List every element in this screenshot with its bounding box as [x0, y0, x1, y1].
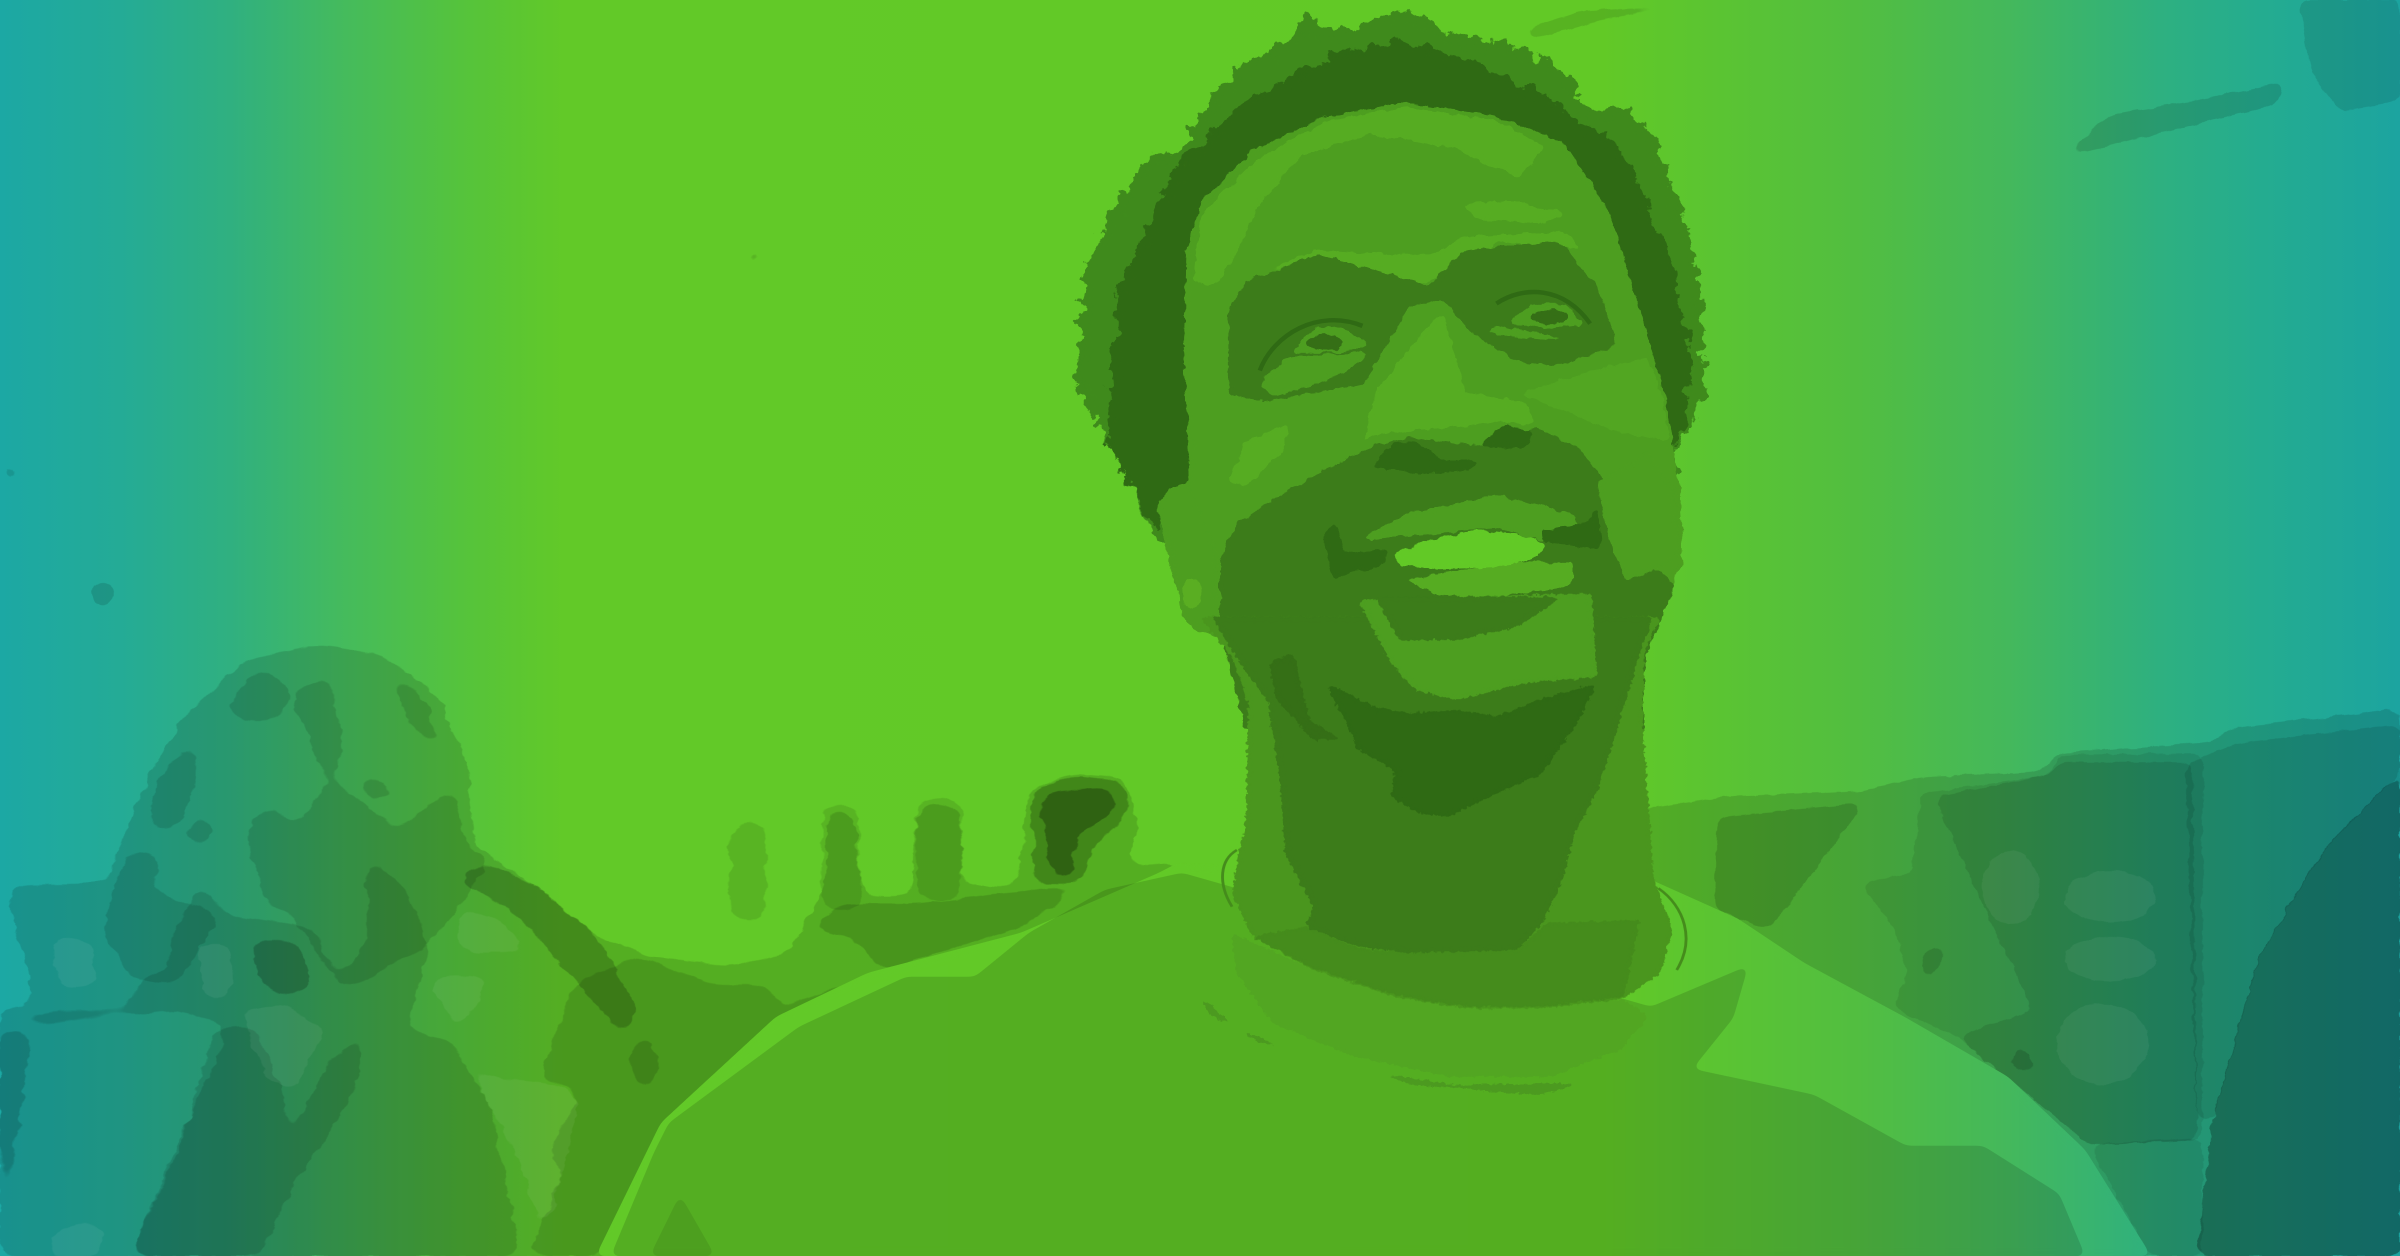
shirt — [596, 863, 2151, 1256]
side beard — [1269, 653, 1342, 740]
chair lower middle fill — [528, 957, 865, 1256]
nose — [1362, 312, 1537, 446]
collar band — [1232, 933, 1648, 1077]
comb end dark block — [1033, 776, 1129, 884]
upper lip — [1358, 496, 1586, 540]
lower column — [2090, 1137, 2202, 1256]
goatee — [1326, 683, 1597, 817]
mouth right corner — [1541, 500, 1601, 549]
left scene: chair and objects — [0, 644, 1200, 1256]
lower lip — [1403, 562, 1572, 598]
left edge dark strip — [0, 1030, 31, 1256]
forehead highlight — [1193, 107, 1546, 286]
light cutouts — [42, 908, 574, 1256]
right column — [2187, 724, 2400, 1121]
right jaw light — [1597, 451, 1682, 580]
background top right marks — [0, 0, 2400, 606]
pale patches — [1983, 851, 2156, 1084]
right cheek highlight — [1519, 357, 1668, 442]
collar lower line — [1195, 993, 1583, 1095]
eye socket shadow — [1229, 241, 1617, 402]
jaw and neck dark — [1212, 617, 1652, 953]
neck base — [1199, 617, 1673, 1008]
left under-eye light — [1260, 353, 1371, 397]
head — [1077, 8, 1704, 732]
shirt main shade — [611, 873, 2085, 1256]
chair dark column — [130, 1026, 367, 1256]
mouth left corner — [1322, 522, 1389, 583]
right eye — [1496, 292, 1590, 328]
neck and jaw — [1195, 593, 1686, 1095]
right under-eye light — [1479, 326, 1586, 344]
comb fingers — [731, 798, 961, 920]
sofa triangle — [1715, 803, 1865, 930]
left cheek highlight — [1229, 424, 1291, 487]
right panel mid shade — [1860, 753, 2202, 1145]
face base — [1157, 103, 1683, 732]
hair outer — [1077, 8, 1704, 580]
collar left line — [1223, 850, 1237, 907]
pole dark section — [628, 1030, 662, 1099]
chin light — [1358, 593, 1597, 700]
far right dark — [2197, 772, 2400, 1256]
neck lower shade — [1252, 920, 1640, 1007]
chair base shape — [0, 644, 1200, 1256]
shirt cover — [596, 863, 2151, 1256]
lower face shadow — [1220, 429, 1675, 732]
comb bar — [811, 884, 1087, 969]
teeth — [1394, 531, 1548, 569]
small dark spots — [1921, 946, 1949, 987]
shirt left pocket shadow — [650, 1195, 715, 1256]
brow highlight — [1246, 232, 1604, 286]
forehead side highlight — [1463, 201, 1568, 223]
collar right line — [1658, 888, 1686, 970]
right scene: sofa and wall — [1600, 709, 2400, 1256]
right panel dark — [1934, 763, 2197, 1145]
sofa base — [1600, 709, 2400, 1256]
chair dark patch — [249, 940, 314, 997]
left nostril — [1371, 442, 1479, 474]
under lip shadow — [1375, 597, 1562, 640]
chair arm — [459, 863, 639, 1034]
chair lower shadow — [0, 855, 520, 1256]
right nostril — [1479, 424, 1534, 449]
left eye — [1260, 320, 1371, 371]
hair dark — [1108, 40, 1693, 531]
ear — [1157, 482, 1220, 625]
chair spots — [103, 667, 490, 989]
